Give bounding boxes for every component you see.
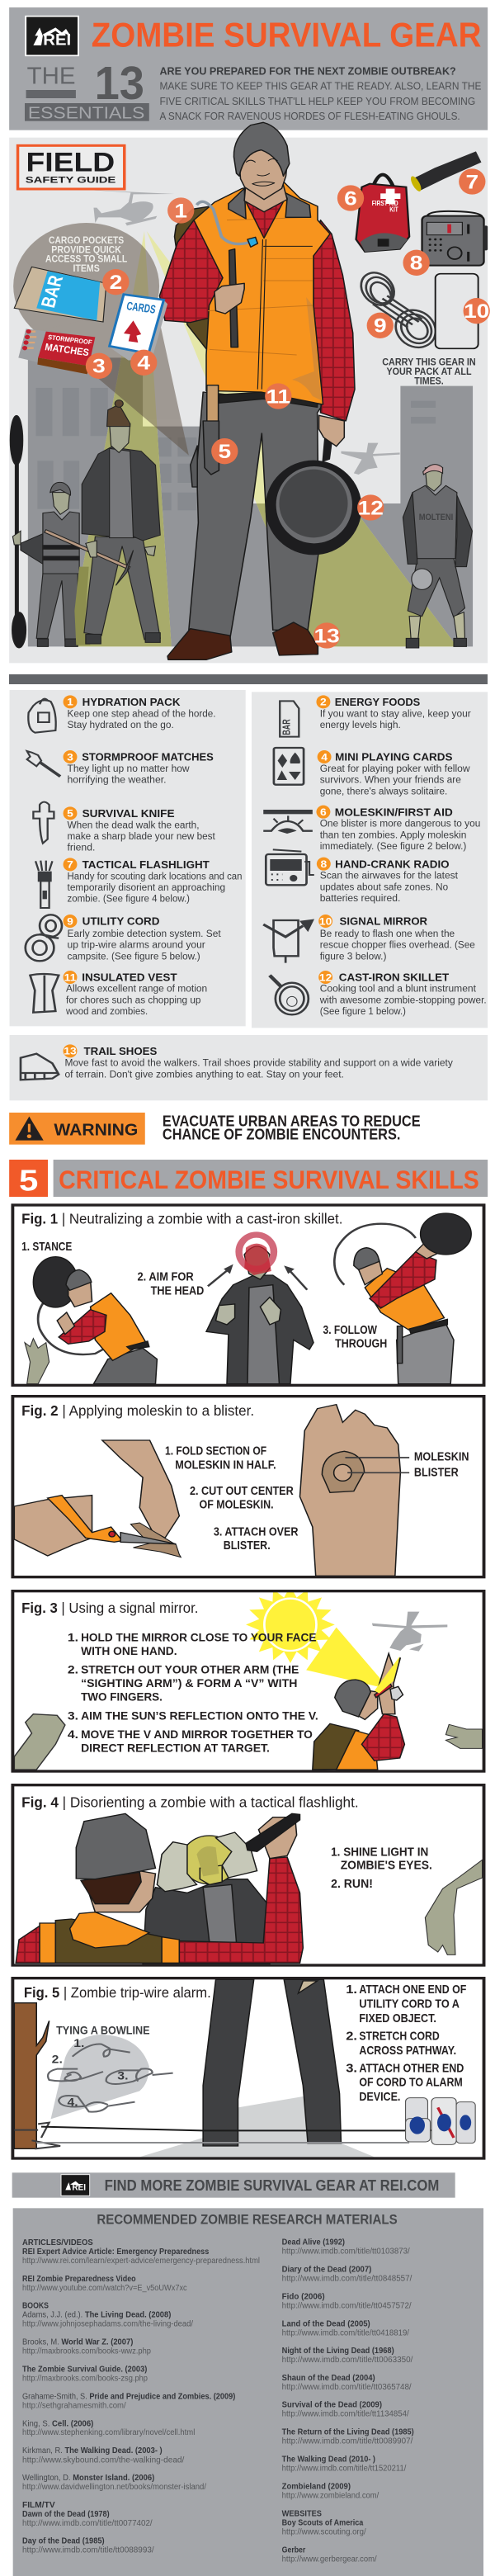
item headings: HAND-CRANK RADIO	[335, 858, 450, 870]
gear: first aid kit: KIT	[389, 206, 398, 214]
column: articles books film: http://maxbrooks.com/books-wwz.php	[22, 2347, 151, 2356]
figure 3 steps: 4.	[68, 1729, 78, 1742]
item descriptions: gone, there's always solitaire.	[320, 785, 447, 796]
column: articles books film: http://www.youtube.com/watch?v=E_v5oUWx7xc	[22, 2284, 187, 2293]
figure 2 steps	[165, 1445, 299, 1553]
gear number callouts: 2	[110, 271, 122, 294]
gear number callouts: 1	[174, 199, 187, 222]
gear number callouts: 12	[358, 496, 384, 519]
column: film and websites: Land of the Dead (2005)	[282, 2319, 370, 2328]
helicopter silhouette	[87, 190, 175, 225]
column: film and websites: Zombieland (2009)	[282, 2482, 351, 2491]
figure 5 steps: 2.	[346, 2030, 357, 2043]
icon: bar	[280, 701, 299, 737]
item descriptions: temporarily disorient an approaching	[68, 882, 225, 893]
column: film and websites: http://www.imdb.com/title/tt0848557/	[282, 2274, 412, 2283]
cargo: stormproof matches: MATCHES	[44, 341, 90, 358]
column: articles books film: King, S. Cell. (2006)	[22, 2419, 93, 2428]
column: film and websites: Shaun of the Dead (2004)	[282, 2374, 375, 2383]
figure 4 steps: 2. RUN!	[331, 1878, 373, 1891]
item descriptions: make a sharp blade your new best	[68, 830, 215, 842]
item descriptions: They light up no matter how	[68, 763, 190, 774]
item descriptions: survivors. When your friends are	[320, 774, 461, 785]
column: film and websites: http://www.scouting.org/	[282, 2527, 366, 2536]
figure 2 steps: BLISTER.	[224, 1539, 271, 1553]
column: articles books film: REI Zombie Preparedness Video	[22, 2275, 136, 2284]
carry this gear caption	[382, 357, 476, 386]
cargo pocket spotlight	[13, 223, 189, 456]
icon: warning triangle	[15, 1117, 44, 1141]
column: film and websites	[282, 2238, 414, 2564]
item headings: MOLESKIN/FIRST AID	[335, 806, 453, 818]
gear number callouts	[86, 168, 490, 649]
item descriptions: Handy for scouting dark locations and can	[68, 870, 242, 882]
item descriptions: for chores such as chopping up	[66, 994, 200, 1005]
figure 3 steps: WITH ONE HAND.	[81, 1646, 177, 1658]
figure 3 steps: HOLD THE MIRROR CLOSE TO YOUR FACE	[81, 1632, 317, 1644]
item descriptions: energy levels high.	[320, 719, 401, 730]
icon: bar: BAR	[280, 719, 293, 735]
zombie fist	[14, 1714, 65, 1770]
the 13 essentials lockup	[25, 57, 149, 122]
column: articles books film: Kirkman, R. The Walking Dead. (2003- )	[22, 2446, 163, 2455]
field safety guide badge: FIELD	[26, 148, 115, 177]
column: film and websites: WEBSITES	[282, 2509, 322, 2518]
item descriptions: If you want to stay alive, keep your	[320, 707, 471, 719]
figure 4 steps: 1. SHINE LIGHT IN	[331, 1846, 428, 1859]
cargo pockets caption	[45, 234, 127, 274]
column: articles books film: ARTICLES/VIDEOS	[22, 2238, 93, 2248]
zombie target	[206, 1246, 314, 1384]
item number badges: 2	[320, 697, 327, 707]
item descriptions: than ten zombies. Apply moleskin	[320, 829, 466, 840]
hero man	[159, 122, 355, 659]
zombie with ice axe	[45, 400, 160, 644]
item headings: UTILITY CORD	[82, 915, 159, 927]
figure 2 steps: OF MOLESKIN.	[200, 1499, 274, 1511]
moleskin labels	[414, 1450, 469, 1479]
item headings: SURVIVAL KNIFE	[82, 807, 175, 820]
item headings: TRAIL SHOES	[84, 1045, 157, 1057]
warning message: EVACUATE URBAN AREAS TO REDUCE	[163, 1113, 421, 1130]
legs of walking zombie	[203, 1979, 341, 2146]
column: film and websites: http://www.zombieland.com/	[282, 2491, 380, 2500]
cargo pockets caption: CARGO POCKETS	[49, 234, 124, 246]
figure 5 steps: UTILITY CORD TO A	[359, 1998, 460, 2011]
column: film and websites: The Return of the Living Dead (1985)	[282, 2428, 414, 2437]
column: articles books film: http://www.stephenking.com/library/novel/cell.html	[22, 2428, 195, 2437]
item descriptions	[64, 707, 487, 1080]
helicopter	[372, 1612, 447, 1652]
item descriptions: Scan the airwaves for the latest	[320, 870, 458, 881]
item descriptions: wood and zombies.	[65, 1005, 148, 1017]
research heading: RECOMMENDED ZOMBIE RESEARCH MATERIALS	[97, 2211, 398, 2227]
spotlight beams	[68, 231, 457, 646]
column: articles books film: Adams, J.J. (ed.). The Living Dead. (2008)	[22, 2311, 171, 2320]
icon: playing cards	[274, 748, 304, 785]
aim arrows	[208, 1264, 307, 1290]
intro text	[159, 66, 481, 123]
item number badges: 6	[320, 806, 327, 818]
figure 1 step labels: THE HEAD	[151, 1284, 204, 1297]
figure 5 steps: OF CORD TO ALARM	[359, 2077, 463, 2089]
figure 3 steps	[68, 1632, 318, 1755]
column: articles books film: Brooks, M. World War Z. (2007)	[22, 2338, 133, 2347]
item number badges: 4	[321, 751, 328, 763]
zombie hand right	[446, 1724, 483, 1748]
zombie right in jersey	[403, 465, 472, 648]
gear: first aid kit: FIRST AID	[372, 200, 398, 207]
figure 2 panel	[12, 1397, 484, 1577]
skillet	[266, 415, 361, 555]
carry this gear caption: YOUR PACK AT ALL	[386, 366, 472, 377]
column: film and websites: http://www.imdb.com/title/tt0418819/	[282, 2328, 409, 2337]
item headings: CAST-IRON SKILLET	[339, 971, 450, 983]
warning label: WARNING	[54, 1120, 138, 1139]
item number badges: 12	[319, 971, 332, 983]
item number badges: 5	[67, 808, 73, 819]
item descriptions: When the dead walk the earth,	[68, 819, 200, 830]
bowline caption: 1.	[73, 2038, 84, 2050]
man from behind	[16, 1813, 179, 1963]
zombie covering eyes	[143, 1832, 270, 1964]
column: articles books film: http://www.skybound.com/the-walking-dead/	[22, 2455, 185, 2465]
item descriptions: horrifying the weather.	[68, 774, 167, 785]
bowline spotlight	[51, 2035, 149, 2119]
call to action bar	[12, 2172, 455, 2198]
column: film and websites: Diary of the Dead (2007)	[282, 2265, 371, 2274]
cargo: stormproof matches: STORMPROOF	[47, 333, 92, 346]
item headings: ENERGY FOODS	[335, 696, 420, 708]
warning message	[163, 1113, 421, 1143]
icon: vest	[31, 974, 59, 1013]
item number badges: 10	[319, 915, 332, 927]
item number badges: 1	[67, 697, 73, 707]
item descriptions: batteries required.	[320, 892, 400, 904]
field safety guide badge	[18, 145, 125, 189]
item descriptions: of terrain. Don't give zombies anything to eat. Stay on your feet.	[64, 1068, 344, 1080]
cargo pockets caption: ACCESS TO SMALL	[45, 253, 127, 264]
logo: REI small	[61, 2175, 90, 2196]
item descriptions: zombie. (See figure 4 below.)	[68, 893, 190, 904]
figure 5 steps: ATTACH OTHER END	[359, 2062, 464, 2075]
bowline caption	[52, 2025, 150, 2109]
figure 4 title: Fig. 4 | Disorienting a zombie with a tactical flashlight.	[21, 1794, 359, 1810]
figure 5 steps: 1.	[346, 1983, 357, 1997]
icon: moleskin blister	[263, 810, 313, 834]
item descriptions: up trip-wire alarms around your	[68, 939, 205, 950]
item headings: HYDRATION PACK	[82, 696, 180, 708]
warning banner	[9, 1113, 421, 1145]
figure 2 steps: 2. CUT OUT CENTER	[190, 1485, 294, 1498]
zombie left with paddle	[10, 415, 79, 648]
figure 4 panel	[12, 1785, 484, 1965]
follow through figure	[354, 1213, 471, 1384]
item number badges: 9	[67, 915, 73, 927]
cargo pockets caption: ITEMS	[73, 262, 100, 274]
knot diagrams	[48, 2044, 173, 2112]
moleskin labels: BLISTER	[414, 1466, 459, 1479]
call to action text: FIND MORE ZOMBIE SURVIVAL GEAR AT REI.COM	[105, 2177, 439, 2194]
figure 3 steps: AIM THE SUN’S REFLECTION ONTO THE V.	[81, 1710, 318, 1723]
signaling man	[313, 1653, 404, 1770]
field safety guide badge: SAFETY GUIDE	[26, 174, 116, 185]
figure 2 steps: 1. FOLD SECTION OF	[165, 1445, 266, 1458]
panel: recommended research materials	[13, 2208, 483, 2576]
gear number callouts: 8	[410, 251, 422, 274]
item descriptions: Early zombie detection system. Set	[68, 928, 221, 939]
gear number callouts: 11	[266, 385, 290, 408]
figure 3 steps: 2.	[68, 1665, 78, 1676]
gear number callouts: 10	[464, 300, 489, 323]
gear: hand-crank radio	[422, 211, 488, 266]
item headings	[82, 696, 453, 1057]
item headings: TACTICAL FLASHLIGHT	[82, 858, 210, 871]
figure 3 steps: STRETCH OUT YOUR OTHER ARM (THE	[81, 1665, 299, 1676]
sun and reflection	[246, 1586, 382, 1686]
icon: skillet	[270, 976, 309, 1014]
header panel	[9, 7, 488, 130]
figure 1 title: Fig. 1 | Neutralizing a zombie with a cast-iron skillet.	[21, 1211, 342, 1227]
figure 5 steps: FIXED OBJECT.	[359, 2012, 436, 2025]
cargo pockets caption: PROVIDE QUICK	[51, 243, 121, 255]
column: film and websites: http://www.imdb.com/title/tt0103873/	[282, 2248, 410, 2257]
lower hand with scissors	[14, 1496, 176, 1556]
figure 4 steps	[331, 1846, 432, 1891]
figure 5 panel	[12, 1978, 484, 2158]
figure 5 title: Fig. 5 | Zombie trip-wire alarm.	[24, 1984, 211, 2001]
panel: the 13 essentials list	[10, 690, 488, 1100]
panel: field safety guide hero illustration	[9, 122, 490, 663]
logo: REI	[26, 17, 78, 55]
olive zombie peek	[74, 567, 91, 645]
figure 1 panel	[12, 1205, 484, 1385]
icon: cord	[26, 915, 62, 961]
figure 3 steps: “SIGHTING ARM”) & FORM A “V” WITH	[81, 1678, 297, 1690]
icon: flashlight	[35, 861, 52, 908]
item descriptions: friend.	[68, 842, 95, 853]
item descriptions: immediately. (See figure 2 below.)	[320, 840, 466, 852]
item number badges: 7	[67, 859, 73, 870]
bowline caption: 2.	[52, 2054, 63, 2066]
item descriptions: Be ready to flash one when the	[320, 928, 455, 939]
gear number callouts: 4	[137, 351, 150, 374]
figure 5 steps: ACROSS PATHWAY.	[359, 2044, 456, 2058]
figure 2 steps: 3. ATTACH OVER	[214, 1526, 299, 1539]
beer can alarm	[406, 2098, 475, 2144]
column: film and websites: Boy Scouts of America	[282, 2518, 364, 2527]
warning message: CHANCE OF ZOMBIE ENCOUNTERS.	[163, 1127, 400, 1143]
item number badges: 3	[67, 751, 73, 763]
item descriptions: Keep one step ahead of the horde.	[68, 707, 216, 719]
column: film and websites: http://www.imdb.com/title/tt0457572/	[282, 2301, 412, 2310]
item descriptions: updates about safe zones. No	[320, 881, 448, 892]
zombie hand	[25, 1339, 50, 1384]
gear: signal mirror	[436, 274, 478, 348]
column: film and websites: Gerber	[282, 2545, 305, 2555]
the 13 essentials lockup: THE	[27, 63, 76, 89]
column: articles books film: http://maxbrooks.com/books-zsg.php	[22, 2374, 148, 2383]
helicopter silhouette small	[341, 443, 400, 475]
item number badges: 13	[64, 1046, 77, 1056]
item number badges: 8	[320, 858, 327, 870]
foot with moleskin	[299, 1405, 409, 1576]
bowline caption: 3.	[117, 2070, 128, 2082]
gear number callouts: 7	[466, 170, 478, 193]
column: articles books film: FILM/TV	[22, 2501, 55, 2510]
figure 3 steps: 1.	[68, 1632, 78, 1644]
section header: 5 critical skills	[9, 1160, 488, 1198]
gear number callouts: 6	[344, 187, 357, 210]
figure 1 step labels: THROUGH	[335, 1337, 387, 1350]
column: articles books film: REI Expert Advice Article: Emergency Preparedness	[22, 2248, 210, 2257]
reflection on v fingers	[375, 1657, 400, 1694]
upper hand	[102, 1440, 179, 1538]
item headings: MINI PLAYING CARDS	[335, 751, 452, 763]
column: articles books film: BOOKS	[22, 2302, 49, 2311]
figure 3 panel	[12, 1586, 484, 1771]
zombie jersey lettering: MOLTENI	[419, 513, 453, 522]
column: articles books film: http://www.imdb.com/title/tt0088993/	[22, 2546, 154, 2555]
the 13 essentials lockup: 13	[95, 57, 144, 109]
column: film and websites: http://www.imdb.com/title/tt0089907/	[282, 2437, 413, 2446]
column: film and websites: http://www.gerbergear.com/	[282, 2555, 377, 2564]
cargo: energy bar	[14, 267, 106, 322]
logo: REI small: REI	[72, 2182, 86, 2192]
item descriptions: Allows excellent range of motion	[66, 983, 207, 994]
gear number callouts: 3	[92, 354, 106, 377]
flashlight arm	[179, 1813, 303, 1963]
item headings: SIGNAL MIRROR	[340, 915, 427, 927]
icon: mirror	[263, 920, 313, 963]
bowline caption: TYING A BOWLINE	[56, 2025, 150, 2037]
column: film and websites: http://www.imdb.com/title/tt1520211/	[282, 2465, 407, 2474]
column: articles books film: http://www.davidwellington.net/books/monster-island/	[22, 2483, 206, 2492]
cargo: playing cards: CARDS	[125, 300, 157, 316]
icon: backpack	[28, 699, 56, 733]
figure 3 title: Fig. 3 | Using a signal mirror.	[21, 1600, 198, 1616]
tree	[14, 2003, 60, 2148]
divider bar	[9, 674, 488, 684]
swing arrow left	[38, 1288, 120, 1354]
figure 1 step labels: 3. FOLLOW	[323, 1324, 377, 1337]
figure 3 steps: TWO FINGERS.	[81, 1692, 163, 1704]
stance figure	[33, 1257, 157, 1384]
figure 5 steps	[346, 1983, 466, 2104]
gear number callouts: 5	[219, 440, 231, 463]
column: articles books film: http://www.imdb.com/title/tt0077402/	[22, 2519, 153, 2528]
bowline caption: 4.	[68, 2097, 78, 2109]
trip wire	[36, 2127, 473, 2143]
item descriptions: Stay hydrated on the go.	[68, 719, 174, 730]
item headings: INSULATED VEST	[82, 971, 177, 983]
column: film and websites: http://www.imdb.com/title/tt0063350/	[282, 2356, 413, 2365]
figure 2 steps: MOLESKIN IN HALF.	[175, 1458, 276, 1472]
section header: 5 critical skills: 5	[19, 1164, 38, 1198]
figure 5 steps: STRETCH CORD	[359, 2030, 440, 2043]
gear: utility cord coil	[355, 267, 443, 354]
swing arrow right	[334, 1224, 416, 1285]
column: articles books film: http://www.johnjosephadams.com/the-living-dead/	[22, 2320, 193, 2329]
gear number callouts: 9	[374, 314, 387, 337]
cargo: playing cards	[110, 295, 167, 361]
moleskin piece	[130, 1523, 181, 1557]
gear: first aid kit	[356, 175, 409, 252]
column: articles books film: The Zombie Survival Guide. (2003)	[22, 2365, 147, 2374]
list icons	[21, 699, 314, 1080]
cargo: stormproof matches	[18, 328, 95, 374]
figure 2 title: Fig. 2 | Applying moleskin to a blister.	[21, 1402, 254, 1419]
column: articles books film: http://www.rei.com/learn/expert-advice/emergency-preparedness.html	[22, 2257, 260, 2266]
column: film and websites: The Walking Dead (2010- )	[282, 2455, 375, 2465]
icon: radio	[266, 849, 314, 885]
target ring	[239, 1235, 274, 1275]
figure 1 step labels	[21, 1241, 387, 1350]
column: film and websites: Night of the Living Dead (1968)	[282, 2347, 394, 2356]
icon: knife	[33, 802, 54, 844]
logo: REI: REI	[43, 31, 71, 49]
item descriptions: campsite. (See figure 5 below.)	[68, 950, 200, 962]
buildings	[28, 357, 473, 646]
column: articles books film: Dawn of the Dead (1978)	[22, 2510, 110, 2519]
icon: trail shoe	[21, 1054, 59, 1080]
item descriptions: (See figure 1 below.)	[320, 1005, 406, 1017]
column: film and websites: http://www.imdb.com/title/tt0365748/	[282, 2383, 412, 2392]
item descriptions: figure 3 below.)	[320, 950, 386, 962]
zombie arm reaching	[425, 1860, 483, 1954]
ground light	[139, 2096, 375, 2157]
item headings: STORMPROOF MATCHES	[82, 751, 214, 763]
column: articles books film: Day of the Dead (1985)	[22, 2537, 105, 2546]
gear: flashlight	[409, 151, 481, 192]
carry this gear caption: TIMES.	[414, 375, 444, 386]
column: film and websites: Survival of the Dead (2009)	[282, 2401, 382, 2410]
figure 3 steps: 3.	[68, 1710, 78, 1723]
figure 3 steps: DIRECT REFLECTION AT TARGET.	[81, 1743, 270, 1755]
icon: match	[27, 751, 60, 777]
figure 1 step labels: 2. AIM FOR	[138, 1271, 194, 1283]
column: film and websites: http://www.imdb.com/title/tt1134854/	[282, 2410, 409, 2419]
column: film and websites: Dead Alive (1992)	[282, 2238, 345, 2248]
figure 4 steps: ZOMBIE'S EYES.	[341, 1859, 432, 1872]
the 13 essentials lockup: ESSENTIALS	[28, 103, 144, 122]
figure 1 step labels: 1. STANCE	[21, 1241, 72, 1254]
column: articles books film	[22, 2238, 260, 2555]
cargo: energy bar: BAR	[37, 273, 68, 310]
column: articles books film: Grahame-Smith, S. Pride and Prejudice and Zombies. (2009)	[22, 2392, 235, 2401]
moleskin labels: MOLESKIN	[414, 1450, 469, 1463]
figure 5 steps: DEVICE.	[359, 2091, 400, 2104]
item descriptions: Great for playing poker with fellow	[320, 763, 470, 774]
item number badges	[64, 695, 332, 1057]
figure 3 steps: MOVE THE V AND MIRROR TOGETHER TO	[81, 1729, 313, 1742]
column: articles books film: http://sethgrahamesmith.com/	[22, 2401, 126, 2410]
column: film and websites: Fido (2006)	[282, 2292, 325, 2301]
column: articles books film: Wellington, D. Monster Island. (2006)	[22, 2474, 154, 2483]
item number badges: 11	[64, 971, 76, 983]
figure 5 steps: 3.	[346, 2062, 357, 2075]
gear number callouts: 13	[314, 624, 340, 647]
